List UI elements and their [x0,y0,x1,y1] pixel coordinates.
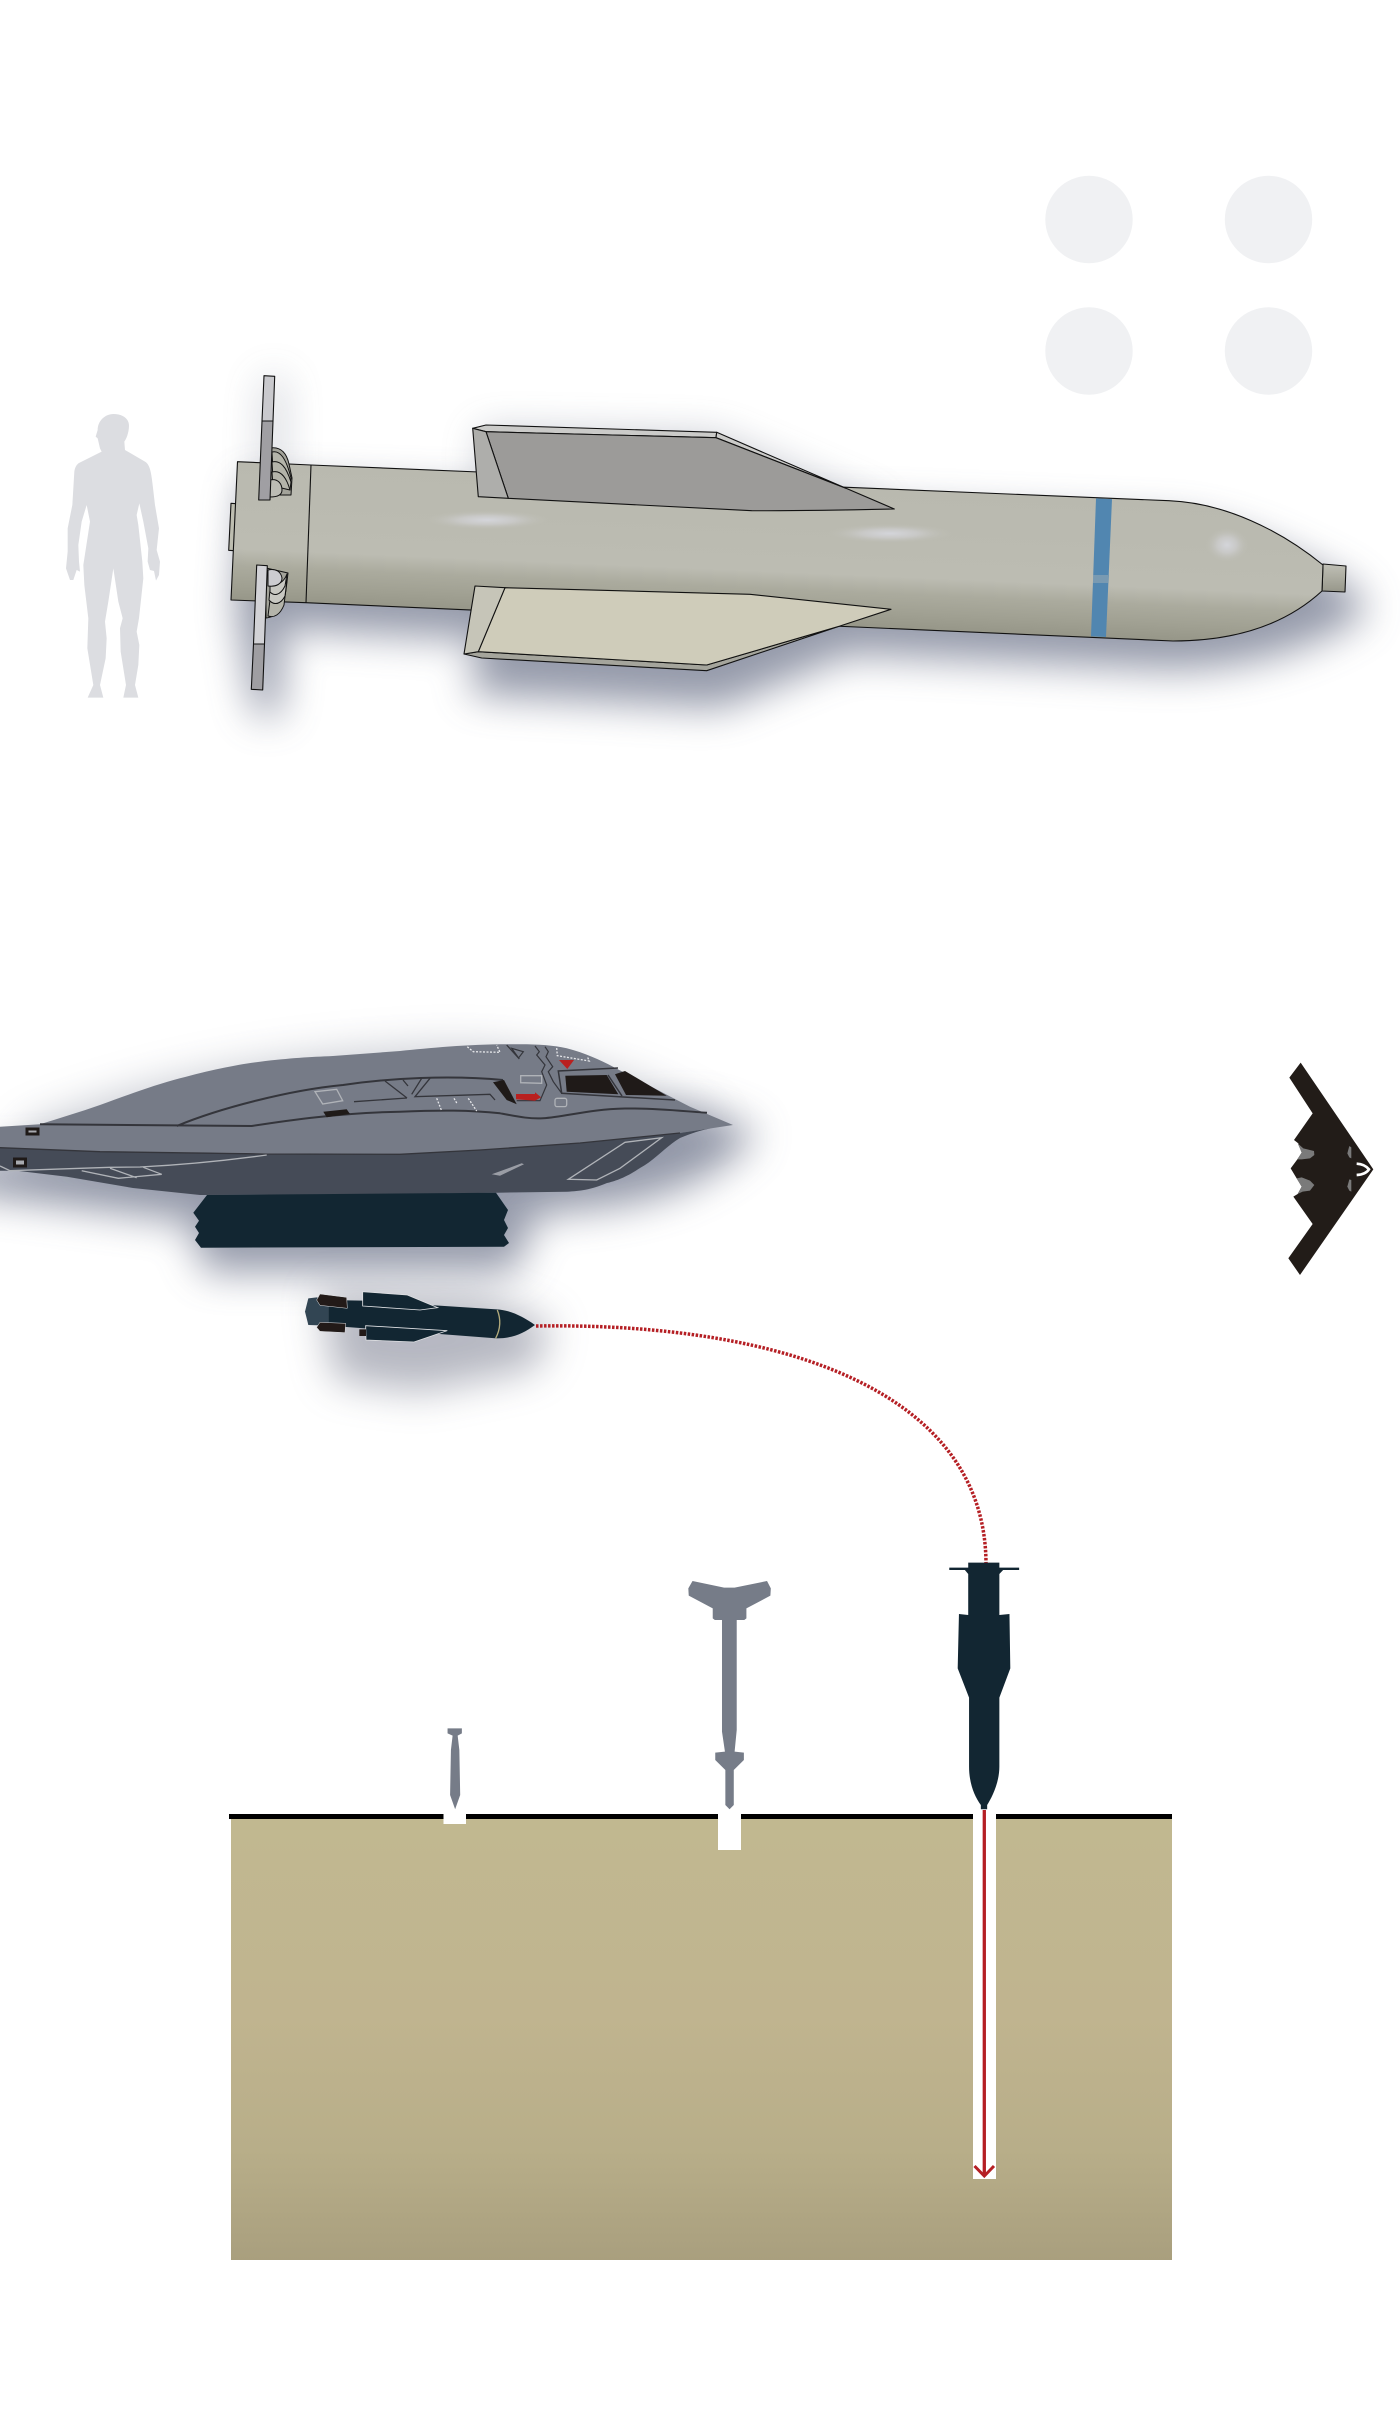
missile [229,376,1346,690]
medium bomb silhouette [688,1581,771,1809]
grey slat [492,1163,524,1176]
lower wing [464,586,891,671]
B-2 bomber side view [0,1044,733,1248]
bomb tail section [305,1297,328,1326]
bomb wings [363,1292,447,1342]
hull seam lines [0,1045,707,1154]
white dashed panels [437,1045,589,1111]
lower tail fin [251,565,267,690]
dotted trajectory [536,1326,986,1563]
missile shadow [236,482,1368,716]
cockpit windows [565,1071,667,1096]
upper tail fin [259,376,275,500]
red triangle marking [559,1060,574,1069]
engine marks [1297,1143,1351,1194]
human scale figure [66,414,160,698]
highlight nose [1205,527,1249,563]
red arrow marking [516,1092,541,1101]
band highlight [1093,575,1108,583]
lower coil bundle [266,568,288,618]
small bomb shadow [320,1292,552,1392]
bomb tail fins [317,1294,347,1333]
intake mark [493,1080,517,1104]
missile body [231,462,1323,641]
massive penetrator silhouette [949,1563,1019,1809]
upper wing [473,425,894,511]
bomber upper hull [0,1044,733,1154]
placeholder circles [1045,176,1312,395]
B-2 plan-view icon [1288,1063,1373,1275]
bomber glow [20,1046,725,1170]
missile glow above wing [262,378,895,520]
penetration arrow [974,1810,994,2176]
medium crater [718,1812,741,1850]
small bomb silhouette [448,1728,462,1809]
pale panel outlines [0,1076,662,1180]
upper coil bundle [270,448,292,497]
square vents [14,1129,38,1166]
small falling bomb [305,1292,535,1342]
bomb body [328,1300,535,1338]
bomb band [496,1310,500,1338]
joint line [306,465,311,603]
highlight rear [423,510,551,530]
dark hatch [323,1109,350,1117]
shallow crater [444,1812,466,1824]
bomber lower hull [0,1125,733,1195]
payload block [193,1193,509,1248]
cockpit crescent [1357,1164,1369,1175]
deep shaft [973,1812,996,2179]
bomb rear block [359,1329,366,1336]
surface line [229,1814,1172,1819]
bomber shadow [0,1110,758,1272]
ground block [231,1817,1172,2260]
highlight mid [826,524,954,544]
blue band [1091,498,1112,637]
nose cap [1322,564,1346,592]
back plate [229,503,236,551]
